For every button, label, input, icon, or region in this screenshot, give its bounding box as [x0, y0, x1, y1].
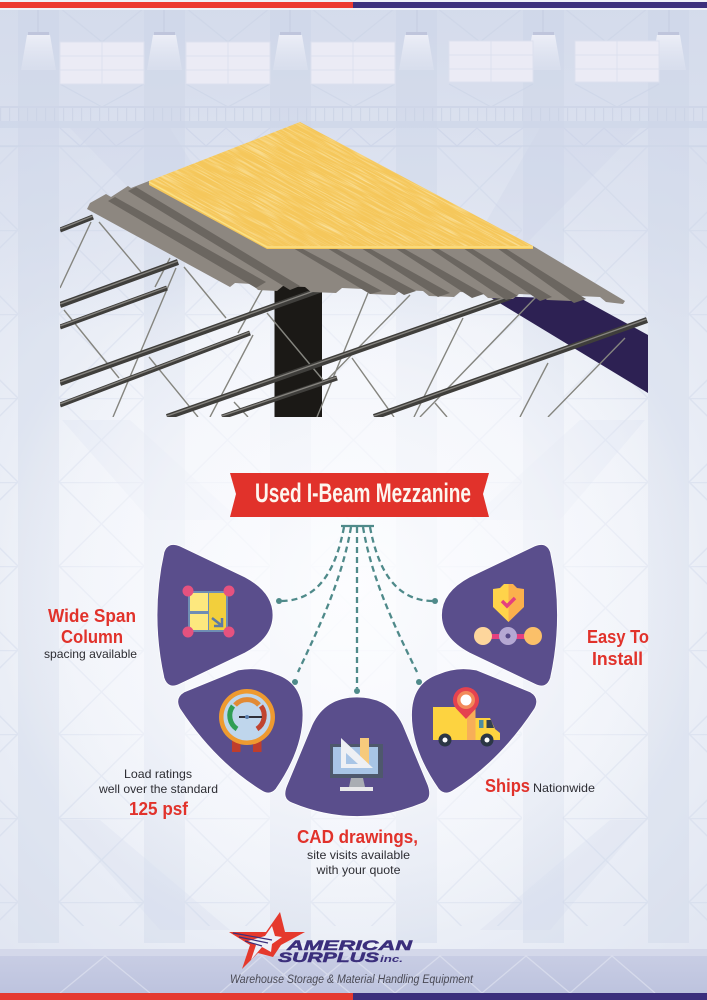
icon: pressure gauge — [219, 689, 275, 752]
panel: easy to install — [442, 544, 558, 686]
icon: shield and bolt — [474, 584, 542, 645]
logo: American Surplus — [229, 912, 474, 986]
label: wide span column: spacing available — [44, 647, 137, 661]
logo: American Surplus: Warehouse Storage & Material Handling Equipment — [230, 974, 474, 986]
logo: American Surplus: inc. — [380, 954, 403, 964]
label: ships nationwide — [485, 776, 595, 796]
background: windows — [60, 41, 659, 84]
panel: CAD drawings — [285, 697, 430, 816]
label: easy to install: Install — [592, 649, 643, 669]
corrugated steel deck — [87, 181, 625, 304]
logo: American Surplus: AMERICAN — [285, 937, 413, 953]
panel: load ratings — [178, 669, 303, 793]
label: CAD drawings — [297, 827, 418, 877]
icon: delivery truck with pin — [433, 687, 500, 746]
bottom floor band — [0, 949, 707, 993]
label: CAD drawings: CAD drawings, — [297, 827, 418, 847]
panel: ships nationwide — [412, 669, 537, 793]
title banner: Used I-Beam Mezzanine — [255, 478, 471, 508]
yellow plywood sheet — [148, 122, 533, 249]
title banner — [230, 473, 489, 517]
label: wide span column: Column — [61, 627, 123, 647]
bottom colour bar — [0, 993, 707, 1000]
truss chords — [60, 216, 647, 417]
icon: monitor with set square and ruler — [330, 738, 383, 791]
label: ships nationwide: Nationwide — [533, 781, 595, 795]
label: load ratings: Load ratings — [124, 767, 192, 781]
background: hanging lights — [21, 8, 686, 70]
icon: red star — [229, 912, 305, 969]
label: load ratings: well over the standard — [98, 782, 218, 796]
icon: floor plan square — [182, 586, 234, 638]
truss web rods — [60, 222, 625, 417]
label: load ratings: 125 psf — [129, 799, 189, 819]
label: ships nationwide: Ships — [485, 776, 530, 796]
navy I-beam — [488, 296, 648, 393]
dashed connectors from the title to the five features — [276, 526, 438, 694]
label: wide span column: Wide Span — [48, 606, 136, 626]
logo: American Surplus: SURPLUS — [278, 949, 380, 965]
label: easy to install: Easy To — [587, 627, 649, 647]
label: wide span column — [44, 606, 137, 661]
label: CAD drawings: with your quote — [315, 863, 401, 877]
label: CAD drawings: site visits available — [307, 848, 410, 862]
label: load ratings — [98, 767, 218, 819]
label: easy to install — [587, 627, 649, 669]
panel: wide span column — [157, 544, 273, 686]
top colour bar — [0, 0, 707, 10]
hero illustration: mezzanine deck on steel trusses — [60, 122, 648, 417]
black support column — [274, 280, 322, 417]
